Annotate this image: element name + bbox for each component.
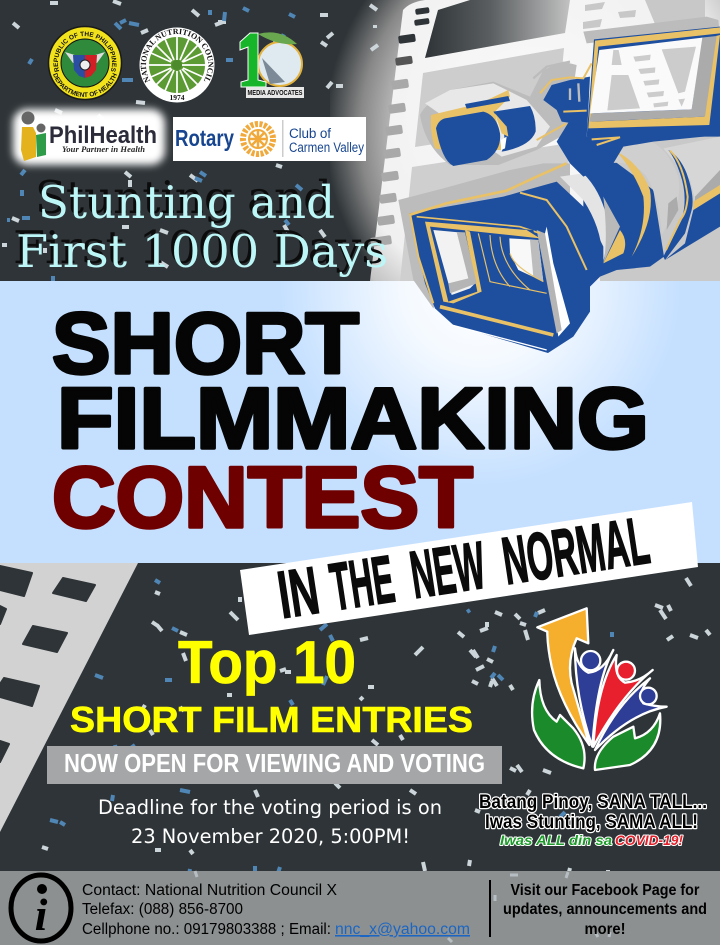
film top right frames	[583, 0, 705, 29]
panel: light blue title band	[0, 281, 720, 563]
viewfinder light body	[425, 83, 550, 157]
handle gold trim	[537, 63, 620, 145]
title: Short Filmmaking Contest: CONTEST	[52, 450, 473, 546]
figure: blue left	[575, 648, 613, 747]
text: contact details: Cellphone no.: 09179803388 ; Email:	[82, 921, 331, 938]
icon: information	[11, 875, 71, 941]
logo: Rotary Club: Club of	[289, 126, 331, 141]
lens inner opening	[420, 220, 553, 330]
figure: blue right	[595, 678, 667, 750]
logo: PhilHealth	[13, 109, 165, 165]
slogan: Batang Pinoy: COVID-19!	[615, 832, 683, 848]
slogan: Batang Pinoy	[479, 792, 707, 848]
lens hood	[409, 163, 603, 353]
camera neck and handle	[543, 77, 720, 177]
logo: Rotary Club: Carmen Valley	[289, 140, 364, 155]
hand: left	[532, 680, 585, 768]
logo: Media Advocates: MEDIA ADVOCATES	[248, 88, 302, 97]
arrow	[537, 608, 589, 745]
hand: right	[595, 713, 660, 770]
heading: Stunting and First 1000 Days: First 1000 Days	[13, 221, 385, 274]
text: Facebook call to action: Visit our Facebook Page for	[510, 882, 700, 899]
film window lower	[400, 143, 570, 281]
film strip: lower left	[0, 563, 138, 832]
slogan: Batang Pinoy: Iwas Stunting, SAMA ALL!	[485, 812, 698, 833]
film window middle	[415, 48, 564, 147]
logo: Rotary Club	[173, 117, 366, 161]
monitor frame	[587, 27, 720, 137]
logo: National Nutrition Council: 1974	[170, 93, 185, 102]
confetti: lower panel	[42, 578, 710, 878]
text: voting deadline	[98, 796, 442, 848]
logo: Department of Health: REPUBLIC OF THE PHILIPPINES	[53, 32, 117, 72]
logo: Department of Health	[48, 26, 122, 100]
text: contact details: nnc_x@yahoo.com	[335, 921, 470, 938]
title: Short Filmmaking Contest: SHORT	[52, 296, 359, 392]
figure: red	[593, 655, 653, 747]
logo: National Nutrition Council: NATIONAL NUTRITION COUNCIL	[140, 28, 214, 84]
heading: short film entries: SHORT FILM ENTRIES	[70, 699, 473, 740]
heading: Stunting and First 1000 Days: Stunting and	[35, 171, 332, 224]
background: dark lower panel	[0, 563, 720, 945]
film window right	[590, 120, 720, 281]
banner words: IN	[273, 553, 324, 633]
grey camera shadow	[398, 17, 720, 308]
background: dark top panel	[0, 0, 720, 281]
eyepiece	[431, 90, 536, 166]
film strip behind camera	[370, 0, 720, 281]
banner words: NEW	[406, 528, 490, 613]
text: Facebook call to action	[503, 882, 707, 938]
glow behind film strip	[330, 0, 720, 281]
logo: PhilHealth: PhilHealth	[49, 122, 157, 149]
heading: Stunting and First 1000 Days: First 1000 Days	[16, 225, 388, 278]
banner: now open for viewing and voting: NOW OPEN FOR VIEWING AND VOTING	[64, 748, 485, 778]
confetti in footer	[195, 871, 610, 942]
text: contact details: Contact: National Nutrition Council X	[82, 882, 338, 899]
sprocket holes	[370, 7, 430, 247]
banner: now open for viewing and voting	[47, 746, 502, 784]
banner words	[273, 503, 654, 633]
slogan: Batang Pinoy: Iwas ALL din sa	[500, 832, 612, 848]
handle grey trim	[533, 62, 579, 102]
logo: PhilHealth: Your Partner in Health	[62, 144, 145, 154]
title: Short Filmmaking Contest: FILMMAKING	[57, 371, 649, 467]
title: Short Filmmaking Contest	[52, 296, 649, 546]
text: Facebook call to action: more!	[584, 921, 626, 938]
panel: footer	[0, 871, 720, 945]
text: voting deadline: 23 November 2020, 5:00PM!	[131, 825, 410, 848]
icon: information: i	[35, 889, 48, 940]
lens barrel rings	[560, 137, 720, 277]
monitor screen shapes	[607, 47, 696, 110]
film window top	[425, 0, 570, 58]
text: Facebook call to action: updates, announcements and	[503, 901, 707, 918]
logo: Department of Health: DEPARTMENT OF HEALTH	[53, 72, 117, 97]
logo: Rotary Club: Rotary	[175, 125, 234, 151]
heading: Top 10: Top 10	[178, 629, 356, 696]
text: contact details	[82, 882, 470, 938]
heading: Stunting and First 1000 Days: Stunting and	[38, 176, 335, 229]
text: contact details: Telefax: (088) 856-8700	[82, 901, 243, 918]
confetti: top panel	[2, 1, 378, 282]
heading: Stunting and First 1000 Days	[13, 171, 388, 278]
banner: In the new normal	[240, 502, 698, 635]
banner words: THE	[325, 542, 399, 625]
logo: Media Advocates	[240, 32, 304, 98]
logo: growth hands and figures	[532, 608, 667, 770]
text: voting deadline: Deadline for the voting period is on	[98, 796, 442, 819]
illustration: video camera	[398, 17, 720, 353]
